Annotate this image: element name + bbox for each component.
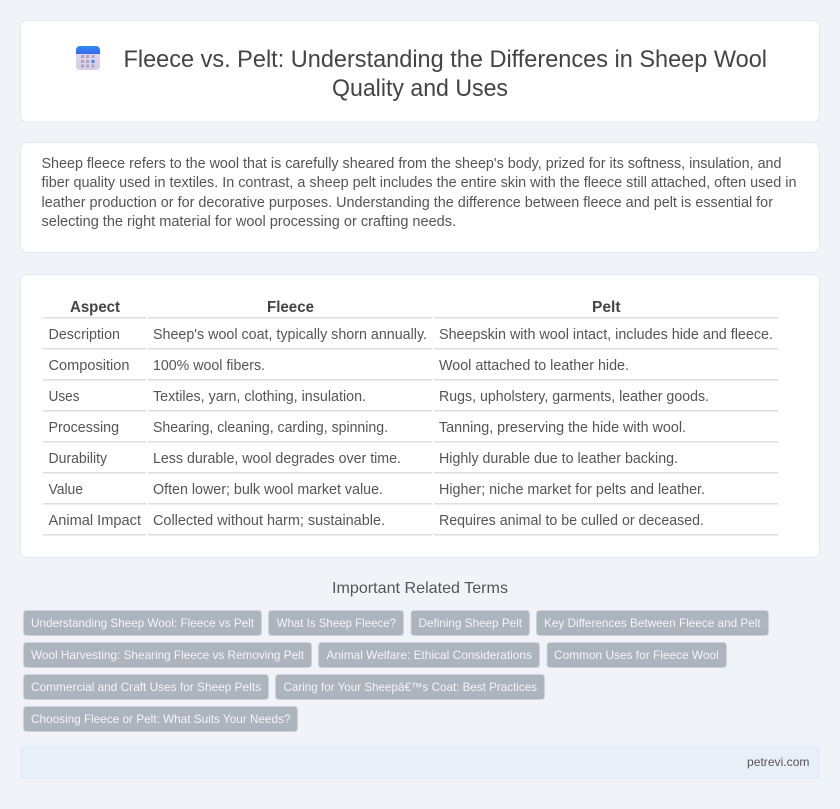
row: processing — [48, 420, 686, 436]
row: durability: Highly durable due to leather backing. — [439, 451, 678, 467]
row: composition — [48, 358, 629, 374]
table header: Aspect — [70, 299, 121, 316]
tag: Choosing Fleece or Pelt: What Suits Your Needs? — [31, 712, 291, 726]
intro paragraph: fiber quality used in textiles. In contrast, a sheep pelt includes the entire skin with the fleece still attached, often used in — [42, 175, 796, 191]
title: Quality and Uses — [332, 75, 508, 102]
tag: What Is Sheep Fleece? — [277, 616, 396, 630]
row: description — [48, 327, 773, 343]
row: uses — [48, 389, 709, 405]
row: uses: Uses — [48, 389, 80, 405]
row: value: Higher; niche market for pelts and leather. — [439, 482, 705, 498]
row: composition: Wool attached to leather hide. — [439, 358, 629, 374]
tag: Animal Welfare: Ethical Considerations — [326, 648, 532, 662]
row: animal impact: Requires animal to be culled or deceased. — [439, 513, 704, 529]
table header: Fleece — [267, 299, 314, 316]
tag — [24, 706, 298, 732]
tag: Key Differences Between Fleece and Pelt — [544, 616, 761, 630]
row: value: Often lower; bulk wool market value. — [153, 482, 383, 498]
row: composition: Composition — [48, 358, 130, 374]
tag: Commercial and Craft Uses for Sheep Pelts — [31, 680, 261, 694]
row: uses: Textiles, yarn, clothing, insulation. — [153, 389, 366, 405]
icon: calendar — [76, 46, 100, 70]
footer bar — [20, 745, 820, 779]
row: animal impact: Animal Impact — [48, 513, 141, 529]
heading: important related terms: Important Related Terms — [332, 580, 508, 597]
tag — [24, 674, 268, 700]
row: durability: Durability — [48, 451, 108, 467]
row: animal impact — [48, 513, 704, 529]
panel: introduction — [20, 142, 820, 252]
row: durability — [48, 451, 678, 467]
row: description: Description — [48, 327, 120, 343]
tag — [536, 610, 768, 636]
row: composition: 100% wool fibers. — [153, 358, 265, 374]
tag — [318, 642, 540, 668]
row: value: Value — [48, 482, 83, 498]
panel: comparison table — [20, 274, 820, 558]
intro paragraph: selecting the right material for wool processing or crafting needs. — [42, 214, 456, 230]
tag: Common Uses for Fleece Wool — [554, 648, 719, 662]
panel: title header — [20, 20, 820, 122]
tag: Understanding Sheep Wool: Fleece vs Pelt — [31, 616, 255, 630]
tag — [268, 610, 404, 636]
tag: Defining Sheep Pelt — [418, 616, 523, 630]
tag: Wool Harvesting: Shearing Fleece vs Removing Pelt — [31, 648, 305, 662]
row: processing: Processing — [48, 420, 119, 436]
intro paragraph: Sheep fleece refers to the wool that is carefully sheared from the sheep's body, prized for its softness, insulation, and — [42, 156, 782, 172]
intro paragraph — [42, 156, 796, 230]
tag — [24, 642, 312, 668]
intro paragraph: leather production or for decorative purposes. Understanding the difference between fleece and pelt is essential for — [42, 195, 773, 211]
tag: Caring for Your Sheepâ€™s Coat: Best Practices — [284, 680, 537, 694]
table header — [70, 299, 621, 316]
row: processing: Tanning, preserving the hide with wool. — [439, 420, 686, 436]
row: value — [48, 482, 705, 498]
tag — [411, 610, 530, 636]
row: processing: Shearing, cleaning, carding, spinning. — [153, 420, 388, 436]
title: Fleece vs. Pelt: Understanding the Differences in Sheep Wool — [124, 46, 767, 73]
tag — [276, 674, 544, 700]
table header: Pelt — [592, 299, 621, 316]
footer source: petrevi.com — [747, 755, 810, 769]
tag — [547, 642, 726, 668]
title — [124, 46, 767, 102]
row: uses: Rugs, upholstery, garments, leather goods. — [439, 389, 709, 405]
row: animal impact: Collected without harm; sustainable. — [153, 513, 385, 529]
row: description: Sheepskin with wool intact, includes hide and fleece. — [439, 327, 773, 343]
tag — [24, 610, 262, 636]
row: description: Sheep's wool coat, typically shorn annually. — [153, 327, 427, 343]
panel: related term tags — [24, 610, 768, 732]
row: durability: Less durable, wool degrades over time. — [153, 451, 401, 467]
